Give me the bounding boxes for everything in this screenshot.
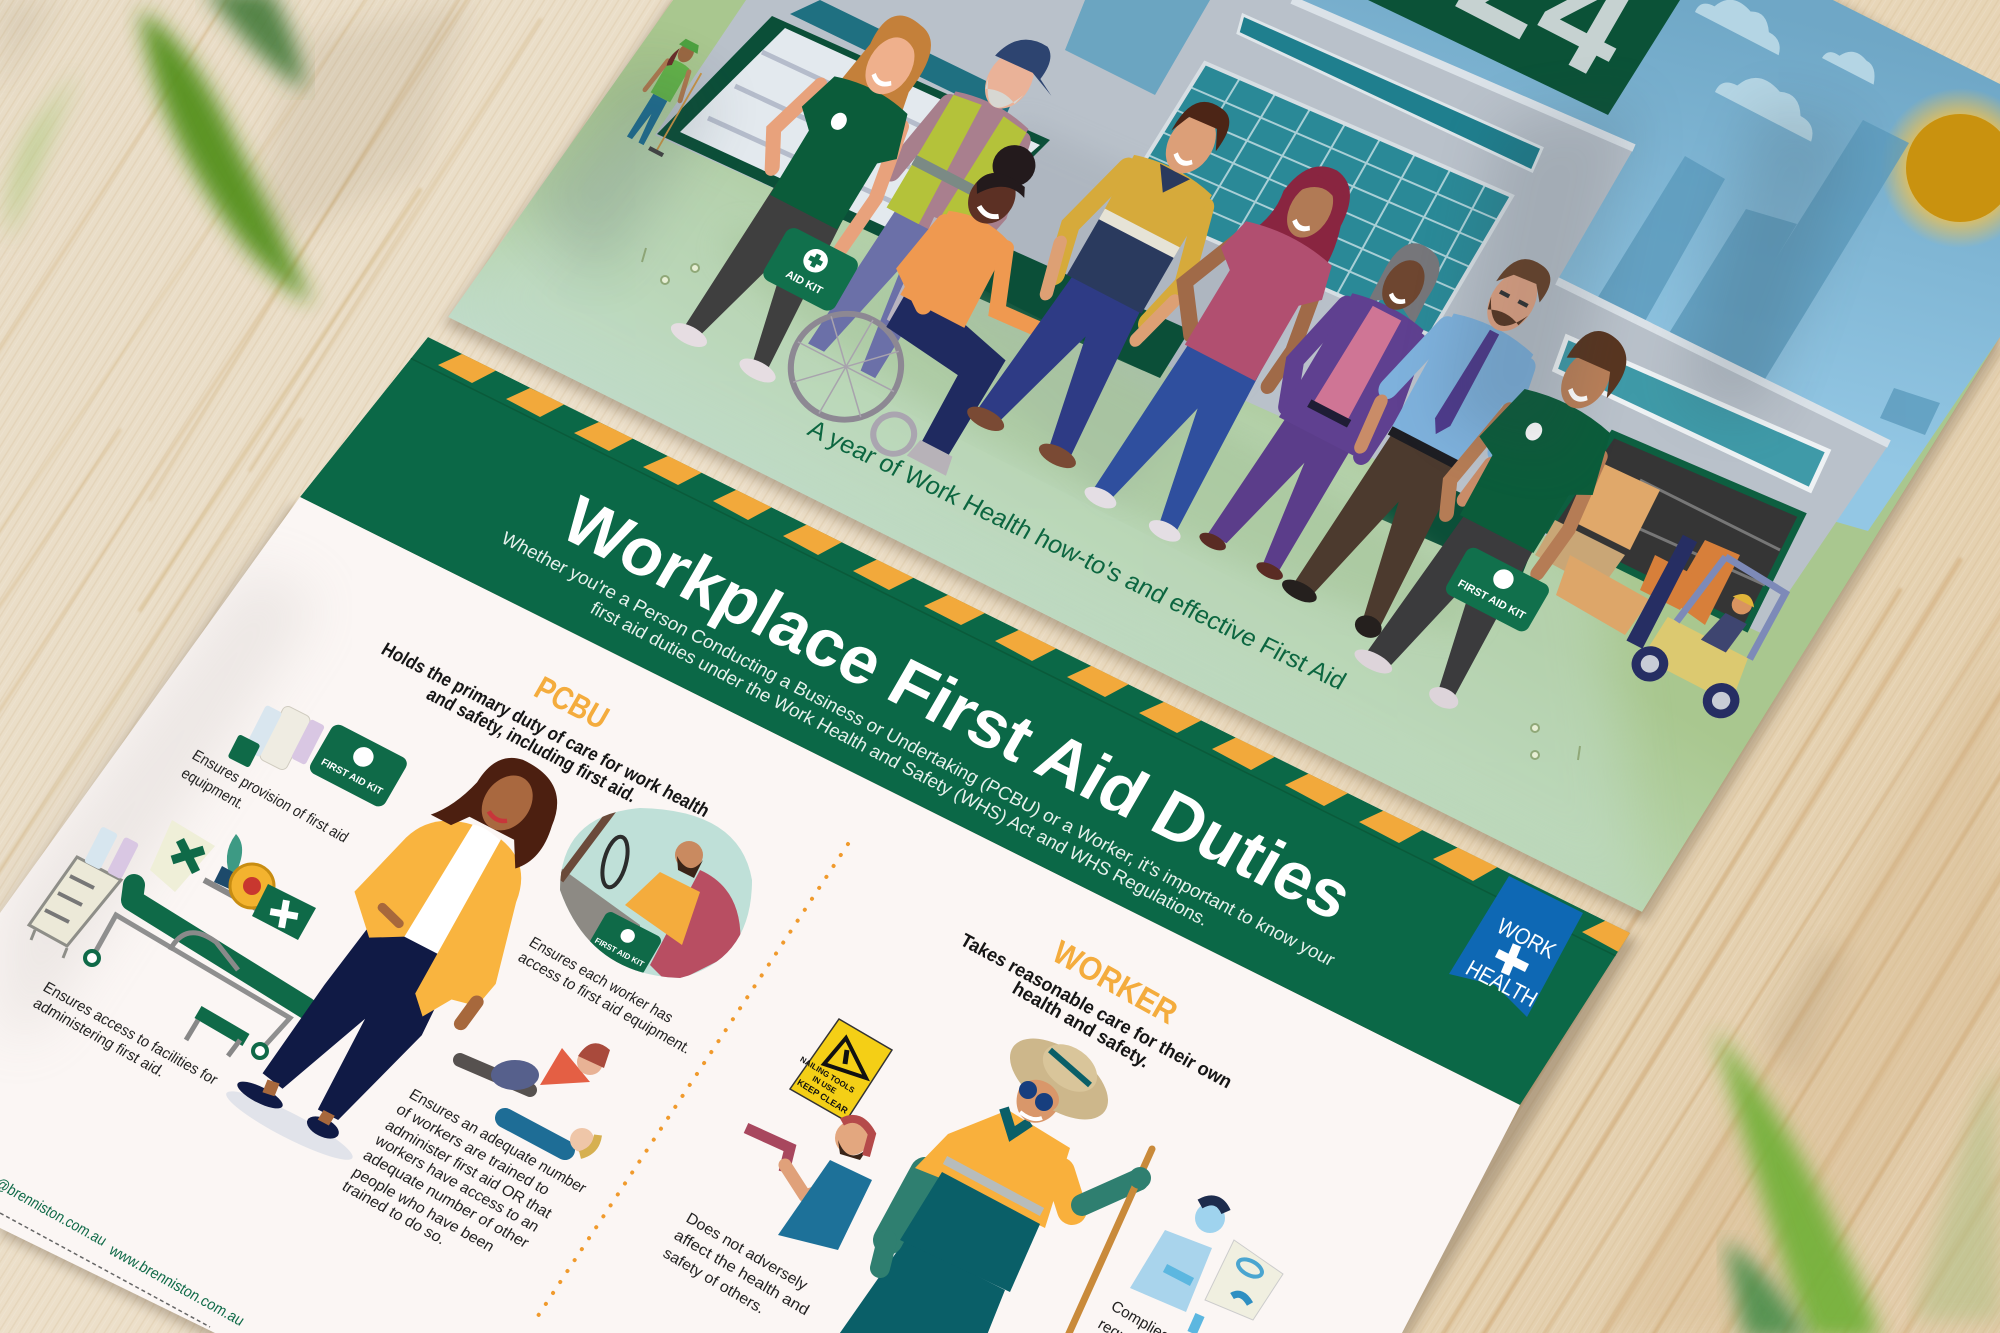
subtitle of calendar: A year of Work Health how-to's and effective First Aid (803, 415, 1351, 695)
first aid room: cabinet, bed, shelf (29, 820, 316, 1058)
stacked crates (1535, 462, 1740, 635)
clouds (1695, 0, 1884, 142)
nail gun worker (746, 1119, 872, 1250)
shadows across the calendar sheet (520, 60, 1860, 460)
first aid supplies: FIRST AID KIT (319, 757, 384, 798)
green header band (300, 337, 1652, 1105)
person: woman in purple suit (1192, 221, 1473, 589)
WORKER heading: WORKER (1047, 933, 1184, 1031)
city skyline (1590, 120, 1940, 435)
grass tufts and flowers (642, 248, 1580, 760)
text: provision of first aid: equipment. (178, 765, 248, 813)
text: provision of first aid: Ensures provision of first aid (189, 747, 351, 846)
text: adequate number of workers: workers have access to an (371, 1132, 542, 1236)
top strip window (1238, 15, 1542, 171)
text: adequate number of workers (339, 1086, 589, 1255)
lower page: white sheet (0, 497, 1520, 1333)
text: adequate number of workers: of workers are trained to (393, 1101, 553, 1199)
text: access to facilities: Ensures access to facilities for (40, 979, 221, 1088)
large grid window (1120, 63, 1512, 335)
left garage door (657, 16, 1050, 260)
gardener in distance (620, 34, 720, 155)
text: access to facilities: administering first aid. (30, 995, 168, 1081)
warehouse door (1547, 434, 1802, 628)
first aid supplies (227, 704, 410, 809)
left page soft shadow (0, 565, 320, 1040)
first aid kit held by woman: AID KIT (783, 269, 825, 297)
hazard sign: KEEP CLEAR (795, 1077, 850, 1116)
text: adequate number of workers: people who have been (349, 1164, 497, 1255)
PPE worker and sign (1130, 1200, 1283, 1333)
wall shadow (972, 143, 1230, 402)
top calendar sheet: illustration (448, 0, 2000, 912)
person: older man in hi-vis vest (796, 13, 1084, 389)
driver with first aid kit circle (550, 800, 760, 990)
worker intro: Takes reasonable care for their own (956, 930, 1235, 1093)
PCBU intro: Holds the primary duty of care for work health (377, 639, 713, 822)
footer contact details (0, 1175, 247, 1330)
hazard sign: NAILING TOOLS (798, 1055, 856, 1095)
building base strip (980, 250, 1528, 572)
driver with first aid kit circle: FIRST AID KIT (593, 936, 646, 969)
first aid kit held by man: FIRST AID KIT (1455, 578, 1528, 622)
person: man in green shirt (1347, 304, 1668, 719)
text: does not adversely affect (660, 1210, 812, 1319)
PCBU intro: and safety, including first aid. (422, 684, 640, 807)
first aid kit held by woman (760, 225, 861, 314)
text: adequate number of workers: Ensures an adequate number (406, 1086, 589, 1197)
person: woman in green polo (658, 0, 967, 387)
hazard sign (790, 1019, 892, 1121)
mint lower edge (448, 90, 1642, 912)
main title: Workplace First Aid Duties (549, 482, 1365, 935)
person: man in yellow sweater (960, 75, 1271, 475)
work and health ribbon badge: WORK (1492, 913, 1561, 964)
text: each worker: access to first aid equipment. (515, 949, 694, 1057)
hazard dashes (438, 354, 1652, 955)
work and health ribbon badge: HEALTH (1461, 955, 1542, 1012)
person: woman in wheelchair (769, 102, 1134, 494)
text: does not adversely affect: Does not adversely (683, 1210, 810, 1294)
worker intro: health and safety. (1009, 978, 1153, 1073)
text: does not adversely affect: safety of others. (660, 1245, 767, 1318)
PCBU heading: PCBU (528, 669, 616, 736)
text: adequate number of workers: administer first aid OR that (382, 1117, 555, 1222)
text: adequate number of workers: trained to do so. (339, 1178, 449, 1248)
building wall (655, 0, 1889, 633)
forklift (1609, 535, 1802, 725)
header intro text: first aid duties under the Work Health and Safety (WHS) Act and WHS Regulations. (587, 597, 1212, 930)
header intro text: Whether you're a Person Conducting a Business or Undertaking (PCBU) or a Worker, it's important to know your (498, 527, 1339, 970)
person: man in blue shirt and tie (1273, 232, 1591, 647)
upper left windows (790, 0, 1210, 118)
sky (1302, 0, 2000, 531)
PCBU woman figure (220, 723, 606, 1183)
worker figure with hat and pole (835, 1022, 1152, 1333)
text: does not adversely affect: affect the health and (671, 1227, 812, 1319)
text: adequate number of workers: adequate number of other (360, 1147, 532, 1252)
sun (1880, 88, 2000, 248)
CPR illustration (460, 1043, 610, 1155)
building roof edges (1292, 0, 1889, 444)
soft shadows over wood (0, 0, 1850, 1080)
dotted column divider (532, 844, 848, 1325)
right lower window (1555, 337, 1828, 490)
ground shadow (699, 186, 1501, 674)
work and health ribbon badge (1449, 876, 1583, 1017)
first aid kit held by man (1443, 545, 1552, 634)
person: woman in pink top (1066, 136, 1383, 548)
hazard sign: IN USE (811, 1074, 838, 1096)
text: each worker: Ensures each worker has (526, 934, 676, 1027)
